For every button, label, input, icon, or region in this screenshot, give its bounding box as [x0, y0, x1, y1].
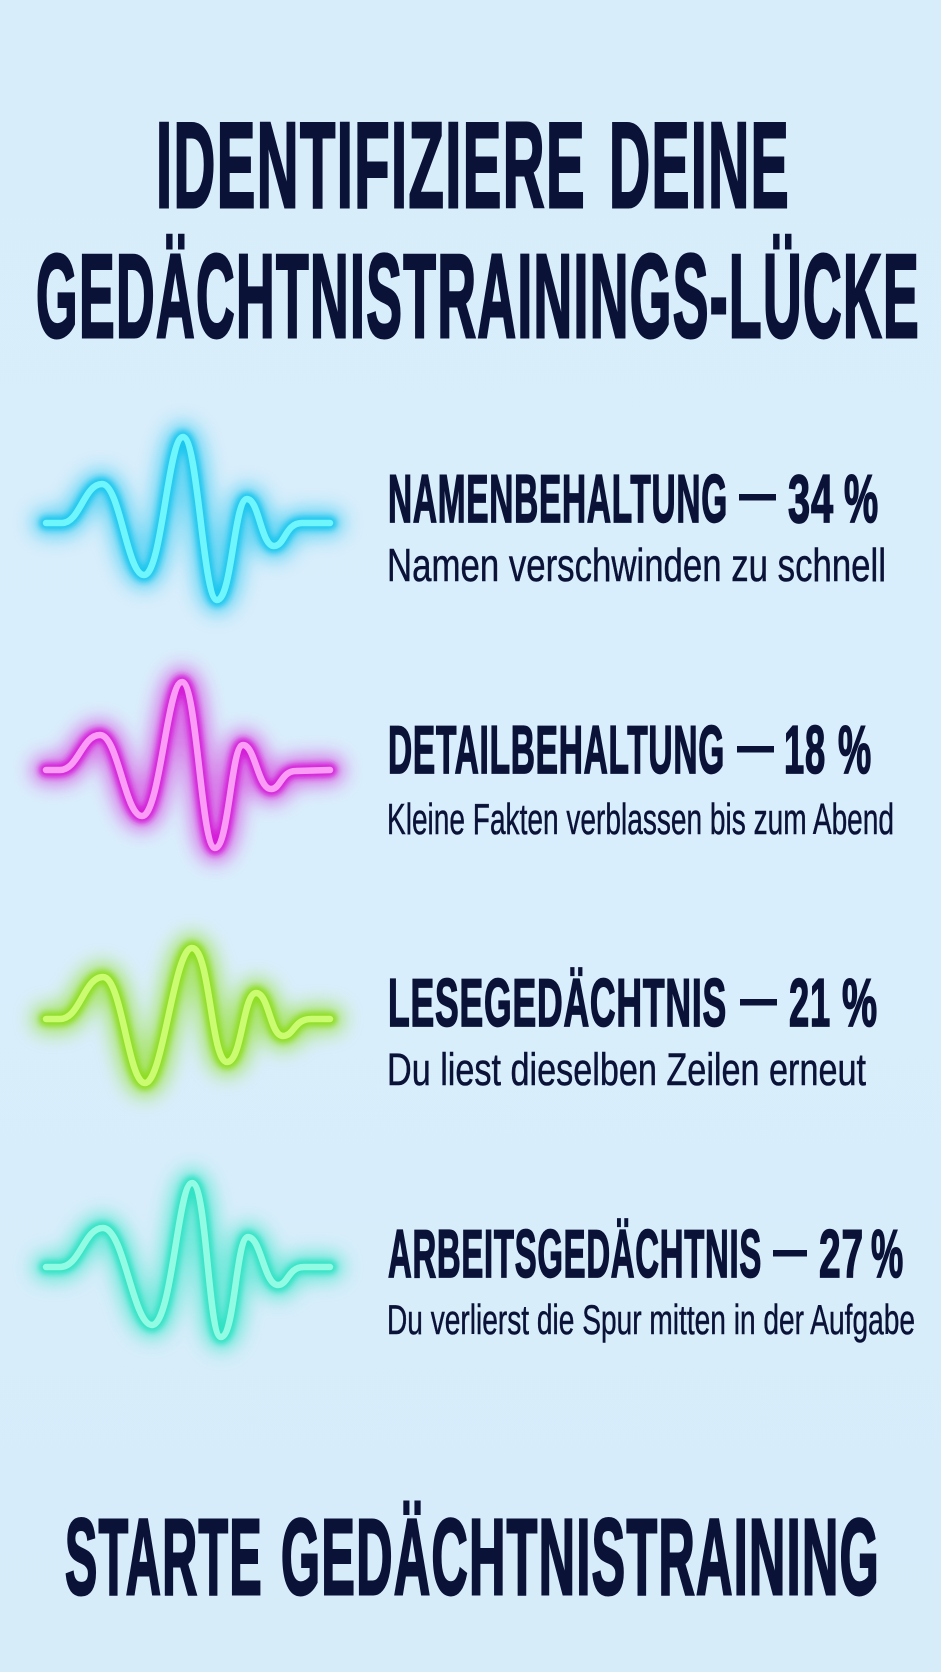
icon: teal neon wave: [46, 1183, 330, 1337]
call to action: STARTE: [65, 1496, 263, 1617]
title: [36, 97, 920, 363]
row: Namenbehaltung: [46, 437, 886, 600]
heading: Arbeitsgedächtnis: 27: [819, 1216, 864, 1292]
heading: Namenbehaltung: —: [739, 455, 776, 529]
heading: Lesegedächtnis: —: [740, 960, 777, 1034]
heading: Lesegedächtnis: 21: [789, 965, 831, 1041]
row: Lesegedächtnis: [46, 948, 878, 1095]
icon: green neon wave: [46, 948, 330, 1083]
row: Arbeitsgedächtnis: [46, 1183, 915, 1343]
heading: Arbeitsgedächtnis: —: [773, 1211, 807, 1285]
icon: magenta neon wave: [46, 682, 330, 848]
heading: Namenbehaltung: %: [844, 461, 879, 537]
icon: cyan neon wave: [46, 437, 330, 600]
heading: Namenbehaltung: 34: [788, 461, 834, 537]
call to action: [65, 1496, 880, 1617]
heading: Detailbehaltung: 18: [784, 712, 826, 788]
row: Detailbehaltung: [46, 682, 894, 848]
heading: Detailbehaltung: —: [737, 707, 774, 781]
heading: Detailbehaltung: %: [838, 712, 872, 788]
heading: Arbeitsgedächtnis: %: [871, 1216, 904, 1292]
heading: Lesegedächtnis: %: [842, 965, 878, 1041]
